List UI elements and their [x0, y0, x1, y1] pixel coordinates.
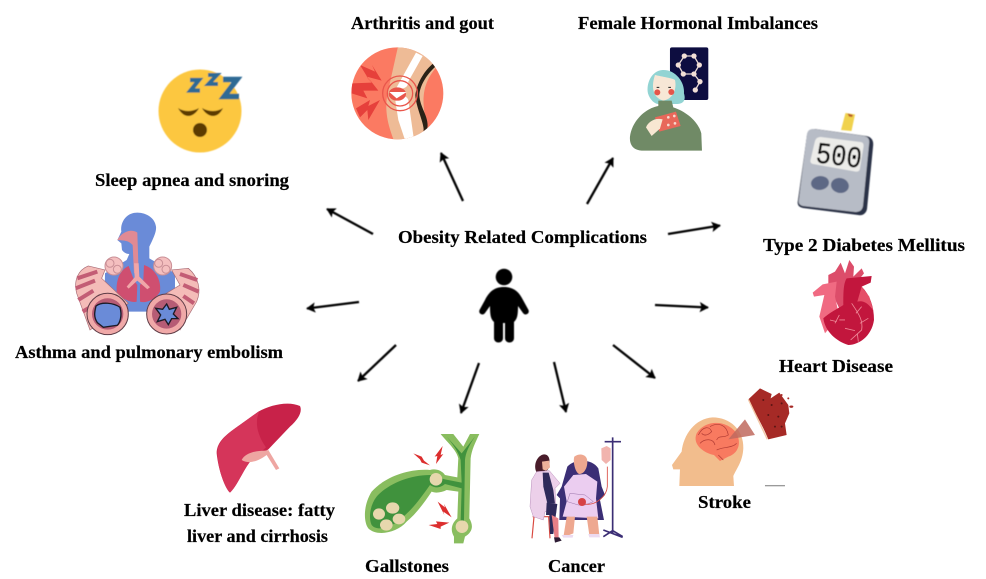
label: Female Hormonal Imbalances: Female Hormonal Imbalances [578, 13, 818, 33]
arrow: to asthma [307, 302, 359, 308]
icon: anatomical heart [813, 260, 874, 345]
icon: glucose meter showing 500: 500 [814, 138, 864, 178]
label: Cancer: Cancer [548, 556, 605, 576]
arrow: to heart disease [655, 305, 708, 308]
arrow: to diabetes [668, 226, 720, 234]
label: Gallstones: Gallstones [365, 556, 449, 576]
icon: gallbladder and bile ducts with stones [365, 434, 479, 543]
icon: stroke, brain in head with blocked vessel [672, 388, 793, 486]
icon: sleeping face [158, 70, 242, 152]
arrow: to liver [358, 345, 396, 381]
label: Sleep apnea and snoring: Sleep apnea and snoring [95, 170, 289, 190]
arrow: to female hormonal imbalances [587, 158, 613, 204]
label: Liver disease: Liver disease: fatty [184, 500, 335, 520]
label: Liver disease [184, 500, 335, 546]
label: Heart Disease: Heart Disease [779, 356, 893, 376]
title: Obesity Related Complications: Obesity Related Complications [398, 227, 647, 247]
icon: respiratory system with airways [76, 213, 199, 335]
label: Liver disease: liver and cirrhosis [187, 526, 328, 546]
icon: cancer patient receiving infusion with doctor [530, 437, 623, 543]
arrow: to gallstones [461, 363, 479, 413]
icon: liver [217, 404, 301, 493]
label: Arthritis and gout: Arthritis and gout [351, 13, 494, 33]
arrows from centre to complications [307, 153, 720, 413]
icon: woman holding pill blister with hormone molecule [630, 47, 708, 151]
arrow: to arthritis [441, 153, 463, 201]
arrow: to stroke [613, 345, 655, 378]
arrow: to sleep apnea [327, 209, 373, 234]
icon: arthritic knee joint [350, 45, 447, 143]
label: Stroke: Stroke [698, 492, 751, 512]
icon: glucose meter showing 500 [798, 113, 873, 215]
label: Type 2 Diabetes Mellitus: Type 2 Diabetes Mellitus [763, 235, 965, 255]
arrow: to cancer [554, 362, 566, 412]
icon: obese person silhouette [479, 269, 529, 342]
label: Asthma and pulmonary embolism: Asthma and pulmonary embolism [15, 342, 283, 362]
